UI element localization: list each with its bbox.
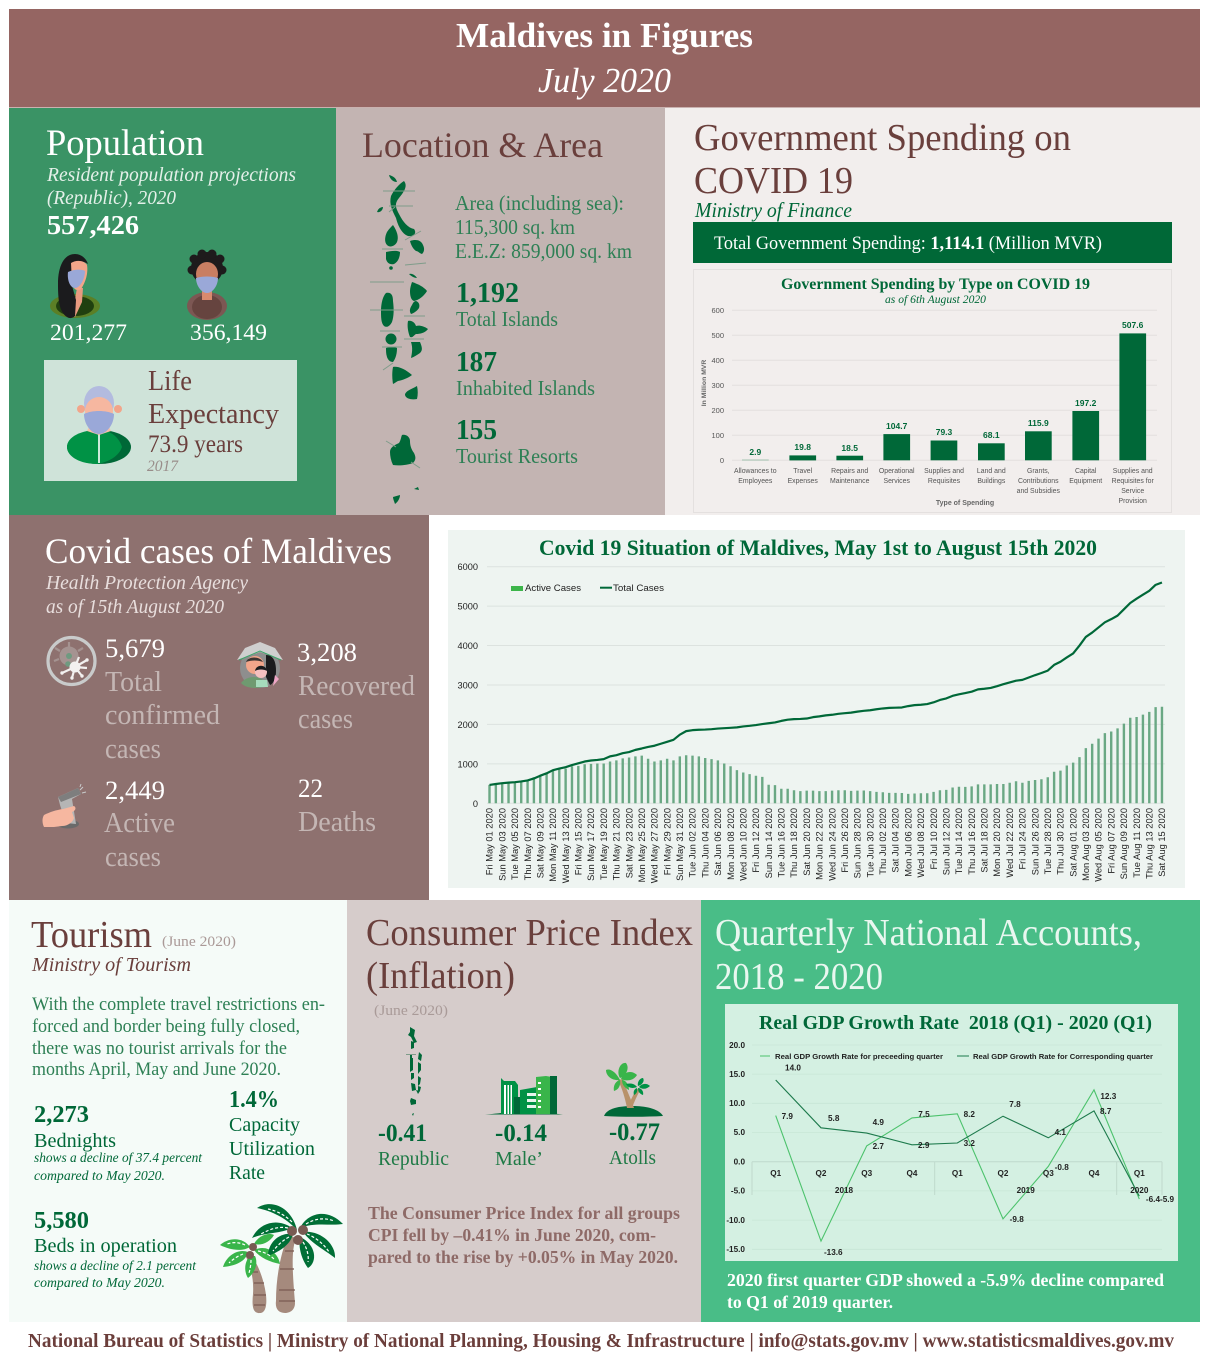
stat: beds in operation: Beds in operation: [34, 1235, 177, 1257]
stat: recovered: cases: [298, 703, 353, 735]
stat: deaths: Deaths: [298, 806, 376, 838]
bar value labels: 18.5: [841, 443, 858, 453]
x axis date labels: Mon Jul 06 2020: [903, 808, 913, 877]
bars: active cases: [490, 707, 1162, 803]
tourism description: With the complete travel restrictions en-: [32, 994, 325, 1015]
stat: active: 2,449: [105, 776, 165, 805]
x axis date labels: Sun May 17 2020: [586, 808, 596, 881]
category labels: Buildings: [977, 478, 1006, 485]
footer: National Bureau of Statistics | Ministry of National Planning, Housing & Infrastructure | info@stats.gov.mv | www.statisticsmaldives.gov.mv: [28, 1331, 1174, 1352]
quarter labels: Q3: [1043, 1169, 1054, 1178]
x axis date labels: Mon Jul 20 2020: [992, 808, 1002, 877]
legend: [760, 1052, 1153, 1061]
x axis date labels: Sun Jun 28 2020: [853, 808, 863, 878]
y axis labels: 0: [720, 456, 724, 465]
stat: active: cases: [105, 841, 161, 873]
x axis date labels: Sun May 31 2020: [675, 808, 685, 881]
panel: location and area: [336, 108, 665, 515]
quarter labels: Q3: [861, 1169, 873, 1178]
bar value labels: 19.8: [794, 442, 811, 452]
bar value labels: 68.1: [983, 430, 1000, 440]
stat: beds in operation: 5,580: [34, 1208, 89, 1234]
line: preceding quarter: [776, 1090, 1139, 1241]
quarter labels: Q1: [770, 1169, 782, 1178]
category labels: Requisites: [928, 478, 961, 485]
gdp note: 2020 first quarter GDP showed a -5.9% decline compared: [727, 1270, 1164, 1290]
tourism description: [32, 994, 325, 1080]
icon: virus: [48, 638, 95, 684]
stat: total confirmed: confirmed: [105, 699, 220, 731]
stat: bednights: Bednights: [34, 1130, 116, 1152]
x axis date labels: Tue Jul 14 2020: [954, 808, 964, 874]
stat: bednights: 2,273: [34, 1102, 89, 1128]
stat: male: -0.14: [495, 1120, 547, 1147]
life expectancy card: [44, 360, 297, 481]
quarter labels: 2020: [1130, 1186, 1149, 1195]
x axis date labels: Wed Jun 10 2020: [738, 808, 748, 881]
stat: recovered: [297, 638, 415, 735]
y axis labels: 6000: [458, 562, 478, 572]
x axis date labels: Thu Jul 16 2020: [967, 808, 977, 875]
stat: male: Male’: [495, 1148, 543, 1170]
bars: [742, 333, 1146, 460]
x axis date labels: Wed May 13 2020: [561, 808, 571, 883]
data labels: 7.5: [918, 1110, 930, 1119]
data labels: 5.8: [828, 1114, 840, 1123]
gdp note: to Q1 of 2019 quarter.: [727, 1292, 893, 1312]
panel: consumer price index: [347, 900, 701, 1322]
data labels: 7.9: [782, 1112, 793, 1121]
y axis labels: 10.0: [729, 1099, 745, 1108]
x axis date labels: Thu Jul 02 2020: [878, 808, 888, 875]
data labels: 4.9: [873, 1118, 884, 1127]
legend: [511, 583, 665, 593]
x axis date labels: Thu May 07 2020: [523, 808, 533, 880]
y axis labels: 600: [711, 306, 724, 315]
category labels: Maintenance: [830, 478, 870, 485]
total population: 557,426: [47, 210, 139, 240]
header banner: [9, 9, 1200, 108]
data labels: -9.8: [1010, 1215, 1024, 1224]
x axis date labels: Sun Jun 14 2020: [764, 808, 774, 878]
y axis labels: -10.0: [726, 1216, 745, 1225]
total spending banner: [693, 222, 1172, 263]
y axis labels: [458, 562, 478, 809]
stat: tourist resorts: Tourist Resorts: [456, 444, 578, 468]
legend: Active Cases: [525, 583, 582, 593]
x axis date labels: Thu May 21 2020: [612, 808, 622, 880]
y axis labels: 400: [711, 356, 724, 365]
x axis title: Type of Spending: [936, 500, 994, 507]
data labels: 7.8: [1009, 1100, 1021, 1109]
stat: recovered: 3,208: [297, 638, 357, 667]
x axis date labels: Fri May 01 2020: [485, 808, 495, 875]
x axis date labels: Thu Jun 18 2020: [789, 808, 799, 878]
life expectancy value: 73.9 years: [148, 431, 243, 458]
x axis date labels: Tue Jul 28 2020: [1043, 808, 1053, 874]
bar value labels: 507.6: [1122, 320, 1144, 330]
stat: male: [495, 1120, 547, 1170]
y axis labels: 200: [711, 406, 724, 415]
map of the Maldives: [370, 175, 428, 504]
x axis date labels: Wed Jul 22 2020: [1005, 808, 1015, 878]
icon: island with palm trees: [604, 1063, 663, 1117]
y axis labels: 20.0: [729, 1041, 745, 1050]
stat: tourist resorts: [456, 415, 578, 468]
x axis date labels: Sun Jul 26 2020: [1030, 808, 1040, 875]
data labels: 12.3: [1100, 1092, 1117, 1101]
x axis date labels: Sat Jul 18 2020: [980, 808, 990, 873]
x axis date labels: Tue Jun 16 2020: [776, 808, 786, 877]
x axis date labels: Sat Jun 06 2020: [713, 808, 723, 876]
life expectancy heading: Life: [148, 365, 192, 397]
x axis date labels: Mon Aug 03 2020: [1081, 808, 1091, 881]
population subheading: (Republic), 2020: [47, 187, 176, 209]
stat: republic: [378, 1120, 449, 1170]
tourism source: Ministry of Tourism: [31, 954, 191, 976]
x axis date labels: Sat Aug 01 2020: [1068, 808, 1078, 877]
gdp note: [727, 1270, 1164, 1312]
subtitle: date: July 2020: [538, 61, 671, 100]
chart subtitle: as of 6th August 2020: [885, 292, 986, 306]
data labels: 3.2: [964, 1139, 975, 1148]
stat: total confirmed: 5,679: [105, 634, 165, 663]
icon: small map of the Maldives: [406, 1027, 422, 1116]
tourism description: months April, May and June 2020.: [32, 1059, 281, 1080]
cpi heading: [366, 912, 693, 997]
y axis labels: 0: [473, 799, 478, 809]
stat: capacity utilization: Rate: [229, 1162, 265, 1184]
category labels: Grants,: [1027, 468, 1050, 475]
cpi description: pared to the rise by +0.05% in May 2020.: [368, 1247, 678, 1267]
x axis date labels: Fri Jun 12 2020: [751, 808, 761, 873]
x axis date labels: Tue Jun 02 2020: [688, 808, 698, 877]
tourism date: (June 2020): [162, 934, 236, 950]
title: Maldives in Figures: [456, 16, 753, 55]
x axis date labels: Wed May 27 2020: [650, 808, 660, 883]
x axis date labels: Sun Aug 09 2020: [1119, 808, 1129, 879]
spending heading: Government Spending on: [694, 117, 1071, 159]
stat: republic: Republic: [378, 1148, 449, 1170]
life expectancy heading: [148, 365, 279, 430]
category labels: Repairs and: [831, 468, 868, 475]
stat: bednights: shows a decline of 37.4 percent: [34, 1150, 203, 1165]
stat: total confirmed: cases: [105, 733, 161, 765]
panel: population: [9, 108, 336, 515]
x axis date labels: Fri Jul 24 2020: [1018, 808, 1028, 870]
accounts heading: [715, 912, 1142, 998]
stat: inhabited islands: [456, 347, 595, 400]
accounts heading: 2018 - 2020: [715, 956, 883, 998]
bar value labels: 79.3: [936, 427, 953, 437]
panel: covid cases: [9, 515, 429, 900]
x axis date labels: Fri May 15 2020: [574, 808, 584, 875]
data labels: -6.4-5.9: [1146, 1195, 1175, 1204]
data labels: 8.7: [1100, 1107, 1112, 1116]
bar value labels: 2.9: [749, 447, 761, 457]
x axis date labels: Fri Jul 10 2020: [929, 808, 939, 870]
x axis date labels: Thu Jul 30 2020: [1056, 808, 1066, 875]
category labels: Services: [883, 478, 910, 485]
category labels: Employees: [738, 478, 773, 485]
area text: 115,300 sq. km: [455, 215, 575, 239]
category labels: [734, 468, 1154, 505]
x axis date labels: Sat Jun 20 2020: [802, 808, 812, 876]
spending heading: [694, 117, 1071, 202]
category labels: Travel: [793, 468, 813, 475]
x axis date labels: Mon May 11 2020: [548, 808, 558, 882]
y axis labels: 3000: [458, 680, 478, 690]
bar chart: spending by type: [694, 270, 1172, 512]
legend: Real GDP Growth Rate for preceeding quarter: [775, 1052, 943, 1061]
bar value labels: [749, 320, 1144, 457]
x axis date labels: Thu Aug 13 2020: [1144, 808, 1154, 879]
population subheading: Resident population projections: [46, 164, 296, 186]
x axis date labels: Tue May 05 2020: [510, 808, 520, 880]
icon: thermometer gun in hand: [42, 784, 86, 828]
quarter labels: Q4: [907, 1169, 918, 1178]
data labels: 2.9: [918, 1141, 930, 1150]
total spending banner: Total Government Spending: 1,114.1 (Million MVR): [714, 233, 1102, 254]
x axis date labels: Sat May 09 2020: [536, 808, 546, 878]
icon: man with mask: [187, 250, 227, 320]
x axis date labels: Tue Jun 30 2020: [865, 808, 875, 877]
panel: government spending: [665, 108, 1200, 515]
quarter labels: 2019: [1017, 1186, 1035, 1195]
y axis labels: 5000: [458, 601, 478, 611]
icon: elderly person with mask: [67, 386, 131, 464]
y axis labels: 100: [711, 431, 724, 440]
panel: tourism: [9, 900, 347, 1322]
cpi description: CPI fell by –0.41% in June 2020, com-: [368, 1225, 656, 1245]
quarter labels: Q4: [1089, 1169, 1100, 1178]
stat: total islands: [456, 278, 558, 331]
location heading: Location & Area: [362, 125, 603, 165]
area text: [455, 191, 632, 263]
y axis labels: 15.0: [729, 1070, 745, 1079]
stat: inhabited islands: Inhabited Islands: [456, 376, 595, 400]
x axis date labels: Sun May 03 2020: [497, 808, 507, 881]
stat: capacity utilization: Utilization: [229, 1138, 315, 1160]
stat: atolls: -0.77: [609, 1119, 660, 1146]
category labels: Expenses: [788, 478, 818, 485]
stat: bednights: [34, 1102, 203, 1183]
category labels: Equipment: [1069, 478, 1102, 485]
x axis date labels: Thu Jun 04 2020: [700, 808, 710, 878]
cpi heading: Consumer Price Index: [366, 912, 693, 954]
stat: bednights: compared to May 2020.: [34, 1168, 165, 1183]
category labels: Service: [1121, 488, 1144, 495]
quarter labels: Q1: [1134, 1169, 1145, 1178]
category labels: Provision: [1119, 498, 1147, 505]
y axis labels: 1000: [458, 759, 478, 769]
spending heading: COVID 19: [694, 160, 853, 202]
category labels: Operational: [879, 468, 915, 475]
x axis date labels: Tue May 19 2020: [599, 808, 609, 880]
quarter labels: [770, 1169, 1149, 1195]
cpi heading: (Inflation): [366, 955, 515, 997]
x axis date labels: Mon Jun 22 2020: [815, 808, 825, 880]
x axis date labels: Sun Jul 12 2020: [942, 808, 952, 875]
chart title: Government Spending by Type on COVID 19: [781, 276, 1090, 293]
stat: active: Active: [104, 807, 175, 839]
x axis date labels: Wed Jun 24 2020: [827, 808, 837, 881]
category labels: Land and: [977, 468, 1006, 475]
cpi description: [368, 1203, 680, 1267]
tourism heading: Tourism: [31, 914, 152, 956]
covid source: Health Protection Agency: [45, 572, 248, 594]
stat: inhabited islands: 187: [456, 347, 497, 378]
icon: family under roof: [237, 642, 283, 688]
stat: deaths: [298, 774, 376, 838]
x axis date labels: Fri Aug 07 2020: [1106, 808, 1116, 874]
x axis date labels: Fri May 29 2020: [662, 808, 672, 875]
data labels: -0.8: [1055, 1163, 1069, 1172]
covid heading: Covid cases of Maldives: [45, 531, 392, 571]
legend: Real GDP Growth Rate for Corresponding quarter: [973, 1052, 1153, 1061]
y axis labels: [711, 306, 724, 465]
line: total cases: [490, 582, 1162, 785]
category labels: Contributions: [1018, 478, 1059, 485]
x axis date labels: [485, 808, 1167, 883]
category labels: Supplies and: [1113, 468, 1153, 475]
stat: capacity utilization: 1.4%: [229, 1087, 279, 1113]
stat: beds in operation: compared to May 2020.: [34, 1275, 165, 1290]
legend: Total Cases: [613, 583, 665, 593]
x axis date labels: Fri Jun 26 2020: [840, 808, 850, 873]
y axis labels: 500: [711, 331, 724, 340]
x axis date labels: Mon May 25 2020: [637, 808, 647, 882]
x axis date labels: Mon Jun 08 2020: [726, 808, 736, 880]
icon: woman with mask: [50, 254, 100, 318]
y axis labels: -5.0: [731, 1186, 745, 1196]
y axis labels: 5.0: [734, 1128, 745, 1137]
category labels: Requisites for: [1112, 478, 1154, 485]
chart title: Covid 19 Situation of Maldives, May 1st to August 15th 2020: [539, 535, 1097, 560]
cpi date: (June 2020): [374, 1003, 448, 1019]
data labels: -13.6: [824, 1248, 843, 1257]
quarter labels: Q1: [952, 1169, 963, 1178]
stat: atolls: [609, 1119, 660, 1169]
category labels: Capital: [1075, 468, 1097, 475]
stat: total islands: 1,192: [456, 278, 519, 309]
population heading: Population: [46, 123, 204, 164]
area text: Area (including sea):: [455, 191, 624, 215]
covid source: as of 15th August 2020: [46, 596, 224, 618]
x axis date labels: Sat Aug 15 2020: [1157, 808, 1167, 877]
stat: beds in operation: [34, 1208, 197, 1290]
chart panel: covid situation: [448, 530, 1185, 888]
stat: deaths: 22: [298, 774, 323, 803]
icon: palm trees: [220, 1204, 343, 1313]
stat: tourist resorts: 155: [456, 415, 497, 446]
data labels: 8.2: [964, 1110, 975, 1119]
stat: beds in operation: shows a decline of 2.1 percent: [34, 1258, 197, 1273]
chart title: Real GDP Growth Rate 2018 (Q1) - 2020 (Q1): [759, 1012, 1152, 1034]
y axis labels: 2000: [458, 720, 478, 730]
x axis date labels: Sat Jul 04 2020: [891, 808, 901, 873]
y axis labels: 300: [711, 381, 724, 390]
bar value labels: 197.2: [1075, 398, 1097, 408]
quarter labels: 2018: [835, 1186, 854, 1195]
stat: capacity utilization: Capacity: [229, 1114, 300, 1136]
y axis title: In Million MVR: [701, 360, 708, 406]
x axis date labels: Sat May 23 2020: [624, 808, 634, 878]
data labels: 14.0: [785, 1064, 801, 1073]
category labels: Allowances to: [734, 468, 777, 475]
life expectancy heading: Expectancy: [148, 398, 279, 430]
area text: E.E.Z: 859,000 sq. km: [455, 239, 632, 263]
y axis labels: [726, 1041, 745, 1254]
stat: republic: -0.41: [378, 1120, 427, 1147]
x axis date labels: Wed Jul 08 2020: [916, 808, 926, 878]
category labels: Supplies and: [924, 468, 964, 475]
stat: total confirmed: Total: [105, 666, 162, 698]
life expectancy year: 2017: [147, 458, 179, 475]
population subheading: [46, 164, 296, 209]
data labels: [782, 1064, 1175, 1257]
tourism description: there was no tourist arrivals for the: [32, 1038, 287, 1059]
stat: capacity utilization: [229, 1087, 315, 1184]
accounts heading: Quarterly National Accounts,: [715, 912, 1142, 954]
stat: recovered: Recovered: [298, 670, 415, 702]
tourism description: forced and border being fully closed,: [32, 1016, 300, 1037]
line chart: real GDP growth: [725, 1004, 1178, 1261]
data labels: 2.7: [873, 1142, 884, 1151]
bar value labels: 115.9: [1028, 418, 1049, 428]
stat: atolls: Atolls: [609, 1147, 656, 1169]
y axis labels: 4000: [458, 641, 478, 651]
covid source: [45, 572, 248, 618]
stat: active: [104, 776, 175, 873]
quarter labels: Q2: [998, 1169, 1009, 1178]
quarter labels: Q2: [816, 1169, 827, 1178]
male population: 356,149: [190, 320, 267, 345]
panel: quarterly national accounts: [701, 900, 1200, 1322]
cpi description: The Consumer Price Index for all groups: [368, 1203, 680, 1223]
y axis labels: -15.0: [726, 1245, 745, 1254]
line: corresponding quarter: [776, 1080, 1139, 1196]
icon: city buildings: [485, 1076, 563, 1114]
source: ministry of finance: Ministry of Finance: [694, 198, 852, 222]
y axis labels: 0.0: [734, 1158, 745, 1166]
female population: 201,277: [50, 320, 127, 345]
x axis date labels: Wed Aug 05 2020: [1094, 808, 1104, 882]
data labels: 4.1: [1055, 1128, 1066, 1137]
stat: total islands: Total Islands: [456, 307, 558, 331]
category labels: and Subsidies: [1017, 488, 1060, 495]
stat: total confirmed: [105, 634, 220, 765]
bar value labels: 104.7: [886, 421, 908, 431]
x axis date labels: Tue Aug 11 2020: [1132, 808, 1142, 878]
